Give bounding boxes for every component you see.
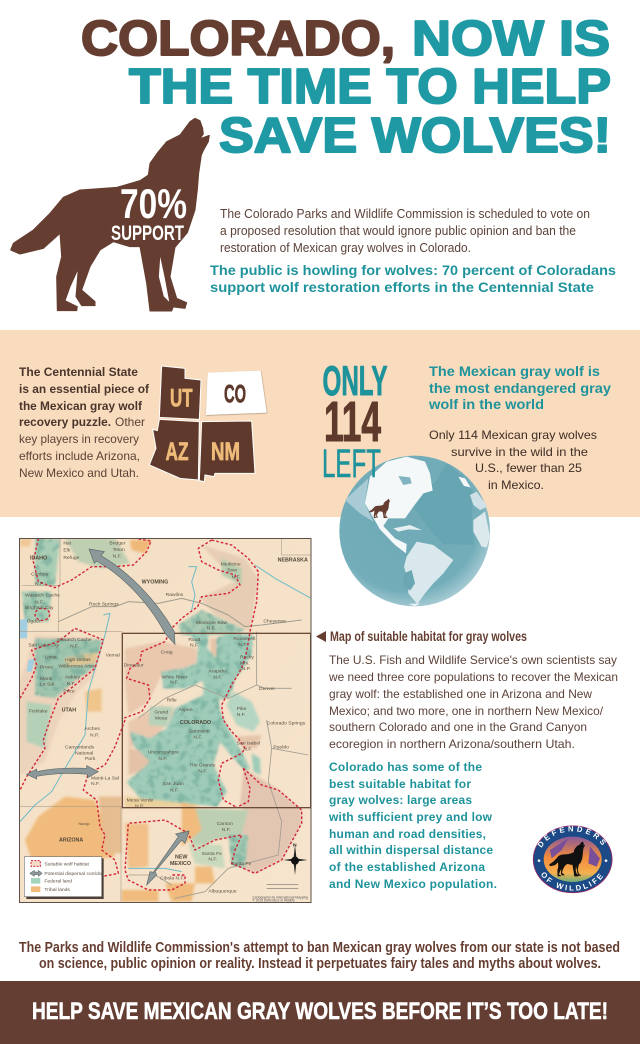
map labels: Teton: [113, 547, 125, 553]
map labels: Mesa Verde: [127, 798, 153, 804]
map labels: High Uintas: [65, 657, 91, 663]
heading: most endangered: the most endangered gray: [429, 380, 611, 396]
map labels: Elk: [63, 548, 71, 554]
map labels: Aspen: [178, 707, 193, 713]
map labels: Arches: [84, 726, 100, 732]
text block: Centennial State: The Centennial State: [19, 365, 138, 379]
map labels: Pueblo: [273, 744, 289, 750]
stat: only 114 left: 114: [324, 390, 381, 454]
map labels: N.F.: [207, 625, 216, 631]
state puzzle map: [149, 366, 267, 482]
map labels: N.F.: [213, 674, 222, 680]
map labels: N.F.: [170, 788, 179, 794]
heading: most endangered: [428, 363, 611, 412]
text block: 114 wolves: U.S., fewer than 25: [475, 461, 582, 475]
map labels: N.F.: [222, 827, 231, 833]
text block: Centennial State: Other: [115, 415, 145, 429]
title: NOW IS: [412, 12, 610, 66]
text block: closing statement: [19, 940, 620, 972]
scale bar and credit: © 2013 Defenders of Wildlife: [252, 899, 295, 903]
compass: N: [293, 842, 297, 848]
stat: only 114 left: ONLY: [322, 357, 388, 404]
map labels: N.F.: [238, 642, 247, 648]
map labels: Rio Grande: [190, 763, 216, 769]
text block: core populations: ecoregion in northern Arizona/southern Utah.: [329, 737, 575, 751]
text block: 114 wolves: Only 114 Mexican gray wolves: [429, 428, 597, 442]
scale bar and credit: [252, 884, 308, 903]
callout: best suitable habitat: with sufficient prey and low: [328, 810, 493, 824]
map caption: Map of suitable habitat for gray wolves: [330, 628, 527, 644]
map labels: Pike: [237, 706, 247, 712]
map labels: San Juan: [163, 781, 184, 787]
map labels: Santa Fe: [202, 851, 222, 857]
state labels: NM: [211, 438, 240, 466]
map labels: Fishlake: [29, 709, 48, 715]
map: suitable wolf habitat: [15, 538, 311, 903]
map labels: N.F.: [91, 781, 100, 787]
state boundaries: [20, 538, 311, 902]
text block: Centennial State: efforts include Arizona,: [19, 449, 140, 463]
state labels: [166, 380, 246, 466]
map labels: Caribou: [31, 572, 49, 578]
map labels: N.F.: [193, 734, 202, 740]
arrow: west dispersal corridor: [27, 766, 98, 779]
map labels: Dinosaur: [124, 663, 144, 669]
map labels: [25, 540, 308, 895]
map labels: N.F.: [237, 712, 246, 718]
text block: Centennial State: [19, 365, 150, 480]
callout: best suitable habitat: Colorado has some of the: [329, 760, 482, 774]
map labels: Uncompahgre: [148, 749, 179, 755]
map labels: Manti-La Sal: [91, 775, 119, 781]
map labels: Refuge: [63, 555, 80, 561]
title: [81, 12, 611, 163]
map legend: Federal land: [44, 878, 72, 884]
map border: [20, 538, 311, 902]
map labels: Albuquerque: [208, 889, 237, 895]
map labels: COLORADO: [180, 720, 211, 726]
map labels: Canyonlands: [65, 744, 95, 750]
icon: howling wolf with 70% support: 70%: [120, 180, 187, 227]
map labels: Bridger: [109, 540, 126, 546]
text block: Centennial State: New Mexico and Utah.: [19, 466, 139, 480]
map labels: Craig: [161, 649, 173, 655]
panel: peach band: [0, 330, 640, 517]
text block: Centennial State: the Mexican gray wolf: [19, 399, 143, 413]
text block: intro: restoration of Mexican gray wolves in Colorado.: [220, 241, 471, 255]
map labels: Medicine Bow: [196, 620, 227, 626]
map labels: Navajo: [78, 822, 90, 826]
text block: Centennial State: recovery puzzle.: [19, 415, 111, 429]
map labels: Nat: [63, 540, 72, 546]
callout: best suitable habitat: gray wolves: large areas: [329, 793, 472, 807]
map labels: IDAHO: [30, 555, 47, 561]
map labels: La Sal: [40, 682, 54, 688]
scale bar and credit: Cartography by International Mapping: [252, 895, 308, 899]
map labels: N.P.: [242, 666, 251, 672]
map labels: WYOMING: [142, 579, 168, 585]
state labels: AZ: [166, 438, 188, 466]
callout: best suitable habitat: and New Mexico population.: [329, 877, 497, 891]
map labels: Provo: [40, 664, 53, 670]
map labels: Medicine: [221, 562, 241, 568]
map mottled mountain texture: [22, 538, 253, 868]
map labels: Wasatch Cache: [25, 593, 60, 599]
map labels: Park: [85, 756, 96, 762]
text block: Centennial State: is an essential piece of: [19, 382, 150, 396]
map labels: Rifle: [167, 698, 177, 704]
map labels: MEXICO: [170, 861, 191, 867]
map labels: N.P.: [90, 733, 99, 739]
text block: 114 wolves: in Mexico.: [488, 478, 544, 492]
callout: public support: [210, 262, 616, 295]
text block: core populations: gray wolf: the established one in Arizona and New: [329, 687, 592, 701]
icon: howling wolf with 70% support: [11, 118, 209, 311]
map labels: Wasatch Cache: [57, 637, 92, 643]
arrow: pointing to map: [316, 631, 326, 642]
logo: Defenders of Wildlife: OF WILDLIFE: [542, 872, 604, 891]
map labels: White River: [162, 674, 188, 680]
icon: howling wolf with 70% support: SUPPORT: [111, 222, 184, 245]
callout: best suitable habitat: [328, 760, 497, 891]
heading: most endangered: The Mexican gray wolf is: [429, 363, 600, 379]
map labels: Mtn.: [240, 660, 250, 666]
map labels: N.P.: [135, 804, 144, 810]
arrow: south dispersal corridor: [147, 831, 189, 885]
text block: Centennial State: key players in recovery: [19, 432, 139, 446]
callout: best suitable habitat: best suitable habitat for: [329, 777, 471, 791]
map labels: N.F.: [113, 553, 122, 559]
map labels: UTAH: [62, 708, 76, 714]
text block: core populations: [328, 653, 618, 751]
map labels: N.F.: [208, 857, 217, 863]
map labels: N.F.: [243, 747, 252, 753]
map labels: N.F.: [35, 599, 44, 605]
map labels: Bow: [227, 568, 237, 574]
callout: best suitable habitat: all within dispersal distance: [329, 843, 493, 857]
map labels: Routt: [188, 637, 201, 643]
map labels: Grand: [154, 709, 168, 715]
text block: core populations: we need three core populations to recover the Mexican: [328, 670, 618, 684]
map labels: Gunnison: [188, 728, 210, 734]
map legend: [24, 857, 104, 899]
land masses: [345, 457, 490, 606]
state labels: UT: [170, 384, 192, 412]
logo: Defenders of Wildlife: [532, 826, 612, 894]
map labels: National: [75, 750, 93, 756]
map labels: N.F.: [70, 643, 79, 649]
text block: 114 wolves: [429, 428, 597, 492]
map labels: ARIZONA: [59, 838, 83, 844]
map labels: Cheyenne: [263, 619, 286, 625]
text block: intro: [220, 207, 590, 255]
map labels: N.F.: [170, 679, 179, 685]
stat: only 114 left: LEFT: [322, 442, 381, 486]
map labels: Roosevelt: [233, 636, 256, 642]
title: THE TIME TO HELP: [129, 60, 611, 114]
map labels: NEBRASKA: [278, 557, 308, 563]
map legend: Suitable wolf habitat: [44, 862, 90, 868]
callout: public support: support wolf restoration efforts in the Centennial State: [210, 279, 594, 295]
roads and rivers: [20, 565, 311, 898]
map labels: N.F.: [35, 581, 44, 587]
state labels: CO: [224, 380, 246, 408]
text block: intro: a proposed resolution that would ignore public opinion and ban the: [220, 224, 576, 238]
map labels: Arapaho: [208, 668, 227, 674]
map labels: N.F.: [190, 643, 199, 649]
states shapes: [149, 366, 267, 482]
text block: intro: The Colorado Parks and Wildlife Commission is scheduled to vote on: [220, 207, 590, 221]
callout: best suitable habitat: human and road densities,: [329, 827, 486, 841]
map labels: Cibola N.F.: [160, 875, 184, 881]
map labels: Rock Springs: [89, 602, 119, 608]
map labels: Wilderness Area: [58, 664, 95, 670]
title: SAVE WOLVES!: [219, 109, 611, 163]
map labels: N.F.: [158, 756, 167, 762]
footer banner: [0, 981, 640, 1044]
map labels: Brigham City: [25, 605, 54, 611]
text block: core populations: The U.S. Fish and Wildlife Service's own scientists say: [329, 653, 617, 667]
map legend: Tribal lands: [44, 887, 70, 893]
compass: [283, 842, 308, 875]
map labels: Mesa: [155, 715, 167, 721]
logo: Defenders of Wildlife: DEFENDERS: [537, 826, 606, 848]
map labels: Uinta: [45, 654, 57, 660]
map labels: Rawlins: [166, 592, 184, 598]
suitable habitat dashed lines: [20, 538, 302, 890]
map labels: Denver: [259, 686, 275, 692]
colorado outline: [122, 633, 311, 808]
map terrain: [15, 538, 302, 902]
map labels: Price: [63, 688, 75, 694]
heading: most endangered: wolf in the world: [428, 396, 544, 412]
text block: 114 wolves: survive in the wild in the: [451, 445, 588, 459]
stat: only 114 left: [322, 357, 388, 486]
callout: best suitable habitat: of the established Arizona: [329, 860, 485, 874]
text block: core populations: southern Colorado and one in the Grand Canyon: [329, 720, 587, 734]
title: COLORADO,: [81, 12, 395, 66]
map labels: Rocky: [240, 654, 254, 660]
arrow: north dispersal corridor: [89, 549, 175, 644]
text block: core populations: Mexico; and two more, one in northern New Mexico/: [329, 704, 604, 718]
map labels: N.F.: [67, 681, 76, 687]
colorado green mountains base: [127, 633, 278, 807]
map labels: Vernal: [106, 653, 120, 659]
callout: public support: The public is howling for wolves: 70 percent of Coloradans: [210, 262, 616, 278]
map labels: N.F.: [198, 768, 207, 774]
map labels: Colorado Springs: [267, 720, 306, 726]
map labels: NEW: [175, 854, 188, 860]
map labels: Manti: [40, 676, 52, 682]
map legend: Potential dispersal corridor: [44, 871, 104, 877]
map labels: Ogden: [27, 618, 42, 624]
map labels: N.F.: [232, 574, 241, 580]
map labels: Salt Lake City: [28, 643, 60, 649]
map labels: Santa Fe: [231, 861, 251, 867]
map labels: Ashley: [65, 674, 80, 680]
map labels: San Isabel: [237, 740, 260, 746]
map labels: Carson: [217, 821, 233, 827]
icon: small wolf on globe: [369, 499, 390, 518]
colorado west pink: [125, 642, 197, 715]
globe with wolf: [339, 456, 490, 606]
